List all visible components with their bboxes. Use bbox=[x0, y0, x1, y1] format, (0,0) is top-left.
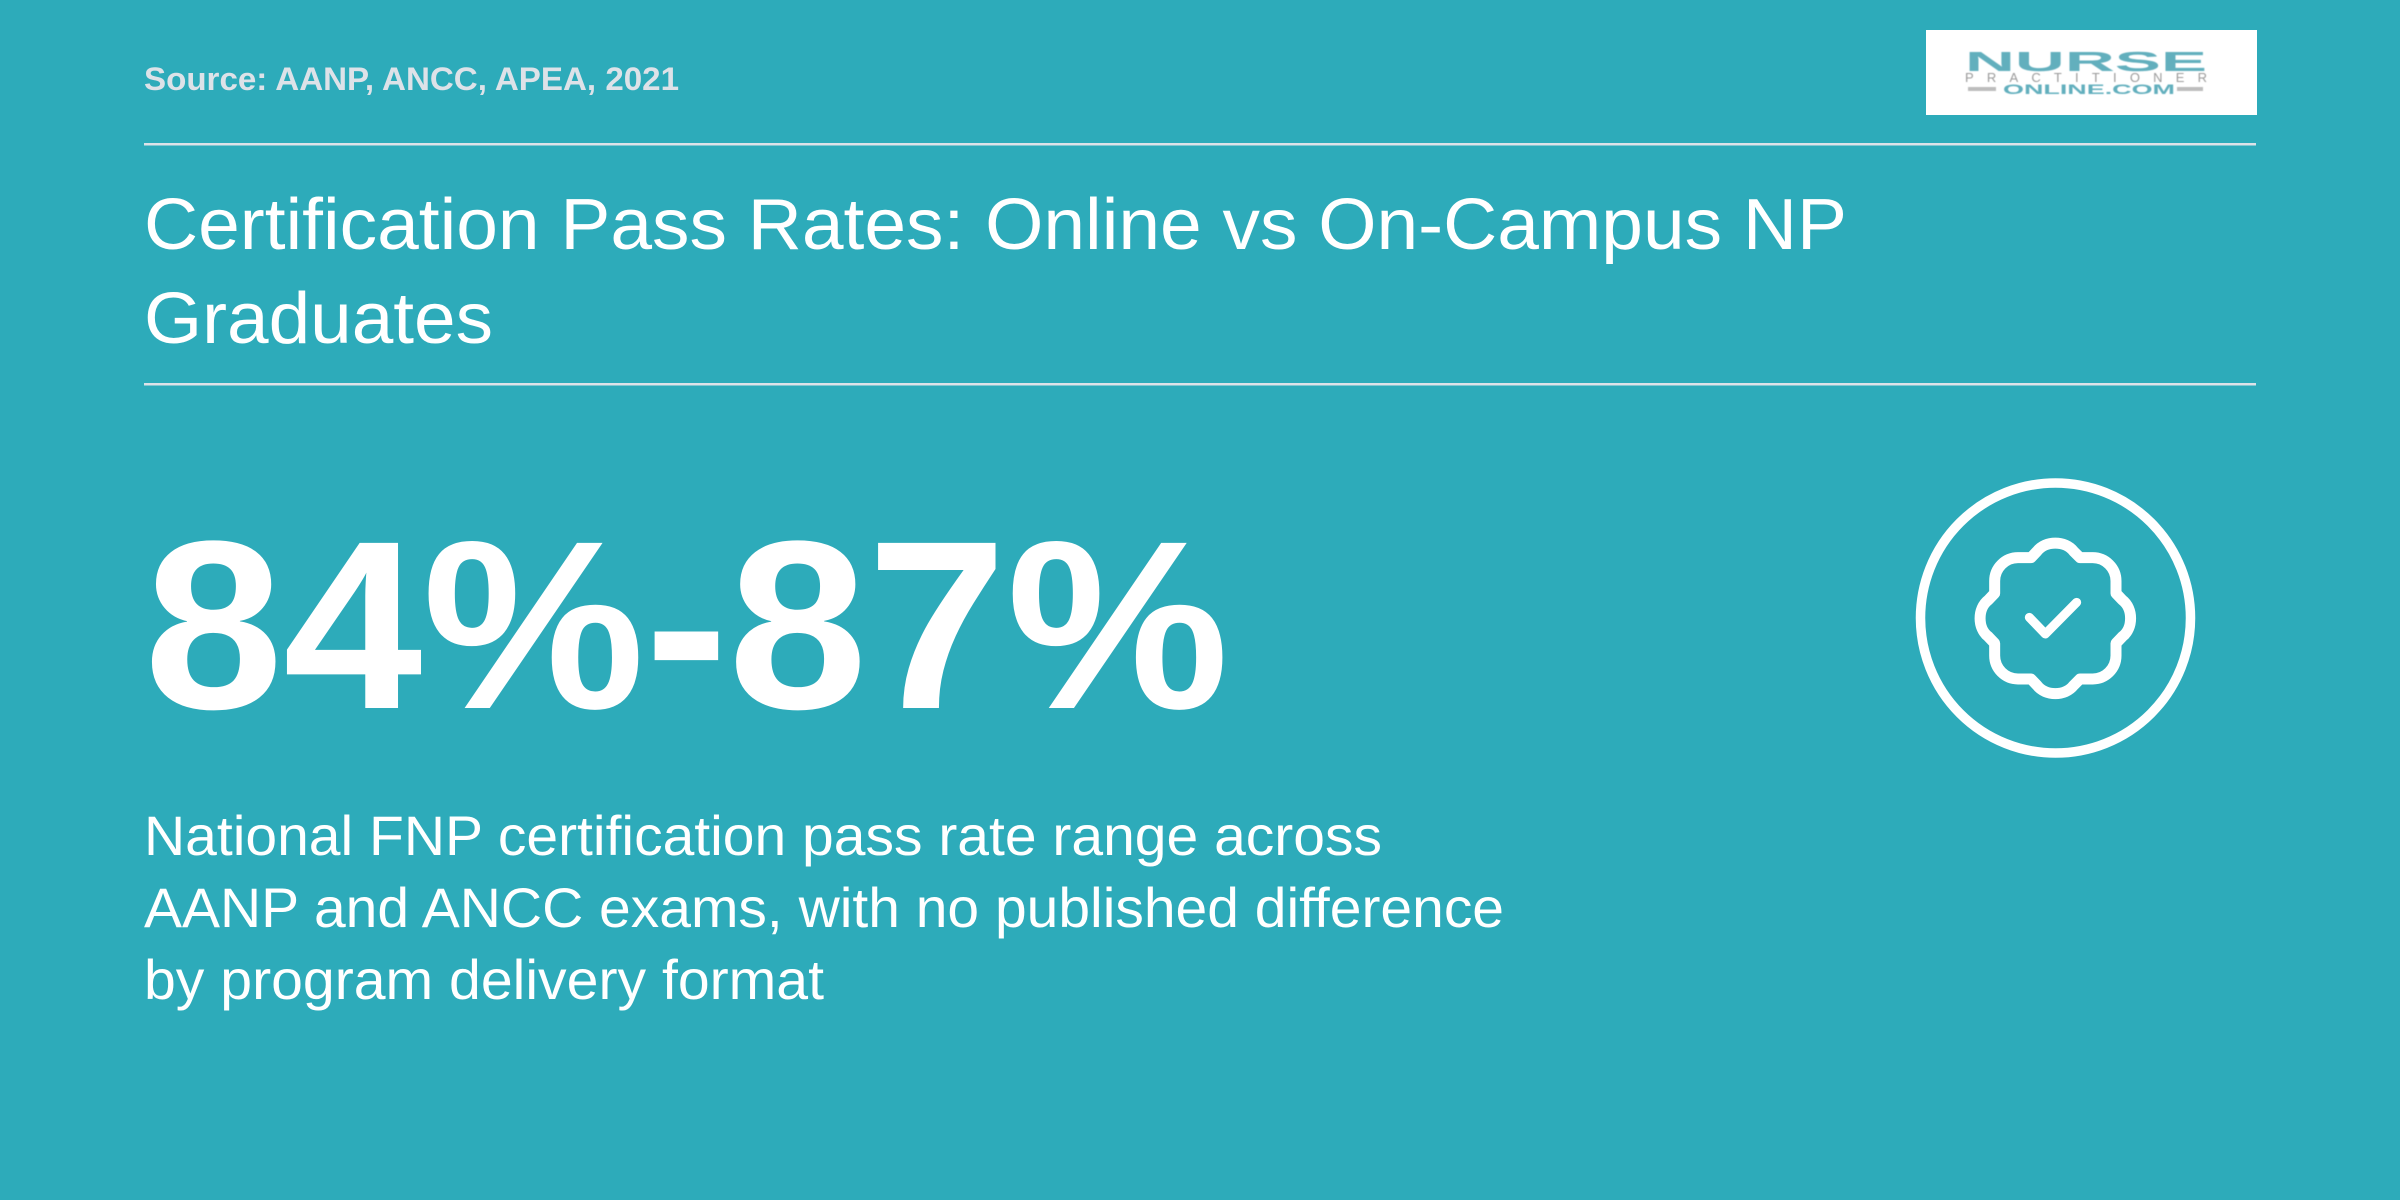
title: Certification Pass Rates: Online vs On-Campus NP bbox=[144, 185, 1847, 265]
logo: Nurse Practitioner Online bbox=[1926, 30, 2257, 115]
title bbox=[144, 185, 1847, 359]
description: by program delivery format bbox=[144, 948, 824, 1011]
logo: Nurse Practitioner Online: NURSE bbox=[1965, 46, 2207, 77]
icon: verified badge in circle bbox=[1920, 483, 2190, 753]
description bbox=[144, 804, 1504, 1011]
description: National FNP certification pass rate range across bbox=[144, 804, 1382, 867]
big statistic: 84%-87% bbox=[144, 491, 1229, 759]
description: AANP and ANCC exams, with no published difference bbox=[144, 876, 1504, 939]
title: Graduates bbox=[144, 279, 493, 359]
logo: Nurse Practitioner Online: PRACTITIONER bbox=[1965, 70, 2207, 85]
logo: Nurse Practitioner Online: ONLINE.COM bbox=[2003, 81, 2175, 97]
source line: Source: AANP, ANCC, APEA, 2021 bbox=[144, 61, 679, 97]
